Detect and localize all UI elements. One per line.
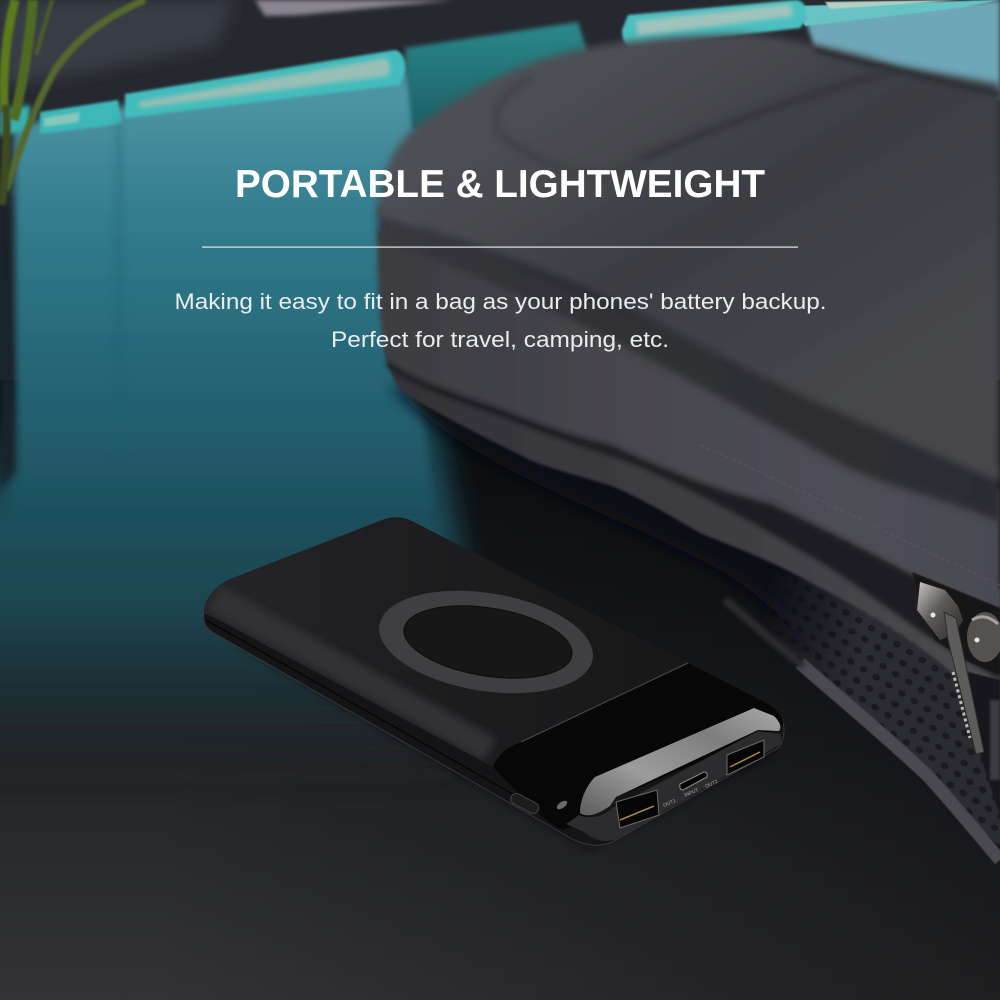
power button (509, 792, 541, 815)
laptop bag (377, 34, 1000, 860)
power bank (203, 517, 784, 850)
power bank: glossy reflection at corner (555, 799, 569, 811)
bag: lower band (384, 345, 1000, 705)
wireless charging ring (372, 577, 600, 707)
table reflection of the wall (0, 400, 462, 790)
power bank: silver front bevel (580, 708, 780, 815)
bag: dark edge under the wall (815, 50, 1000, 95)
port labels: OUT2 (704, 779, 719, 790)
plant leaves and stem (0, 0, 145, 490)
top right lit strip (622, 0, 806, 48)
port labels (662, 779, 719, 809)
zipper pulls (917, 582, 1000, 754)
description text: Perfect for travel, camping, etc. (331, 327, 669, 352)
bag: fold shadow (386, 361, 1000, 680)
bag: lid top (378, 34, 1000, 482)
bag: mesh pocket (784, 578, 1000, 846)
power bank: rounded edge highlight (215, 598, 490, 750)
description text (174, 289, 826, 352)
top right light wall (805, 0, 1000, 100)
port labels: INPUT (683, 787, 700, 799)
zipper pull tab (944, 612, 984, 754)
bag: stitched band (377, 230, 1000, 612)
ring: outer textured band (372, 577, 600, 707)
USB-C input port (680, 772, 707, 790)
description text: Making it easy to fit in a bag as your phones' battery backup. (174, 289, 826, 314)
power bank: front face (566, 731, 781, 841)
main lit strip (125, 50, 405, 118)
ring: inner disc (399, 595, 577, 689)
bag: stitch line (700, 445, 1000, 585)
title: PORTABLE & LIGHTWEIGHT (235, 163, 765, 206)
zipper slider right (967, 612, 1000, 662)
teal wall panel with lit edge (0, 0, 1000, 790)
power bank: soft shadow (220, 635, 780, 850)
zipper slider left (917, 582, 963, 640)
bag: zipper channel (912, 572, 1000, 675)
bag: lid stitched panel groove (495, 72, 890, 174)
power bank: side wall (203, 612, 784, 845)
USB port left (616, 790, 659, 828)
power bank: seam line (206, 620, 562, 822)
bag: dark gap right of the zipper pull (960, 670, 1000, 815)
USB port right (727, 740, 764, 775)
bag: shadow on the table (392, 385, 1000, 850)
power bank: glossy end (493, 663, 783, 830)
bag: piping edge (725, 600, 1000, 860)
port labels: OUT1 (662, 798, 677, 809)
bag: dark seam band (378, 205, 1000, 522)
divider line (202, 246, 798, 248)
power bank: matte top (204, 517, 688, 767)
